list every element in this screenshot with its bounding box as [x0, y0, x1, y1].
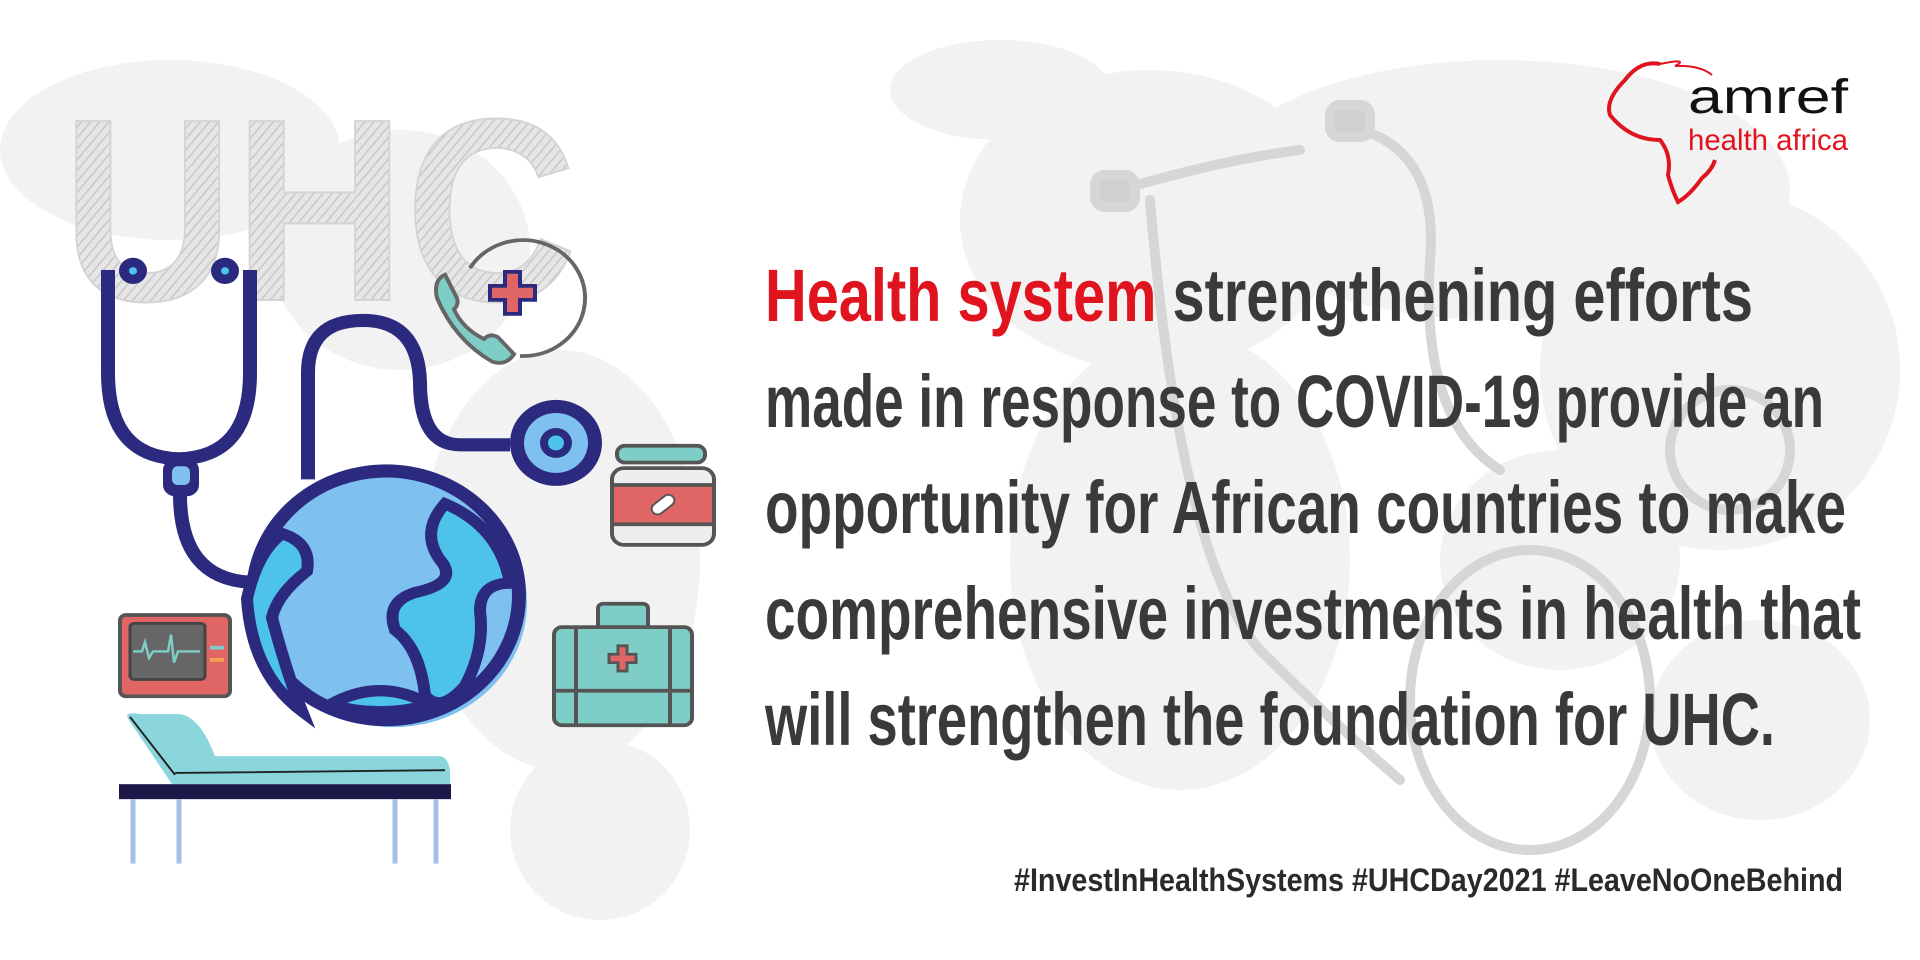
hashtags: #InvestInHealthSystems #UHCDay2021 #LeaveNoOneBehind — [1014, 862, 1843, 898]
logo: amref health africa: amref — [1688, 71, 1849, 124]
logo: amref health africa: health africa — [1688, 124, 1848, 157]
stethoscope with globe — [108, 258, 602, 727]
logo: amref health africa — [1609, 61, 1849, 202]
main message text: Health system strengthening efforts — [765, 254, 1753, 337]
illustration group — [108, 240, 714, 864]
main message text — [764, 254, 1861, 761]
UHC sketch letters: UHC — [62, 66, 577, 356]
icon: medical kit — [554, 604, 692, 725]
icon: hospital bed — [119, 713, 451, 864]
icon: phone with cross — [436, 240, 585, 363]
icon: heart monitor — [120, 615, 230, 696]
background stethoscope (faint) — [1095, 105, 1790, 850]
icon: pill jar — [612, 446, 714, 545]
